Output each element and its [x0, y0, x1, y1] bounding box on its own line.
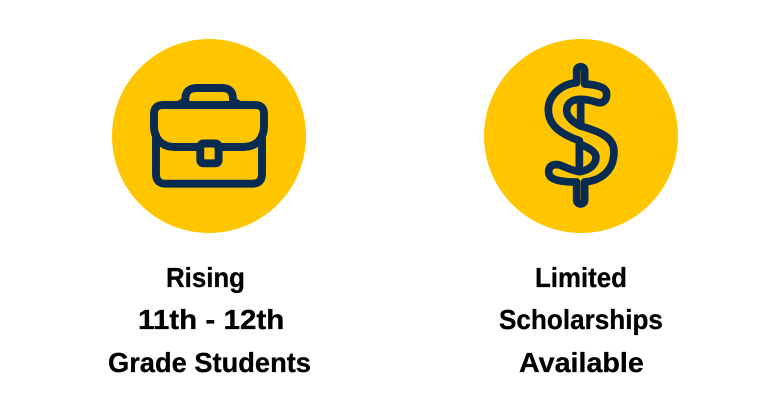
text: rising 11th - 12th grade students — [108, 262, 311, 378]
text: rising 11th - 12th grade students: 11th - 12th — [138, 305, 284, 336]
text: limited scholarships available: Limited — [535, 262, 627, 293]
panel: limited scholarships — [484, 39, 678, 379]
text: limited scholarships available: Available — [519, 347, 644, 379]
panel: rising students — [108, 39, 311, 378]
text: limited scholarships available: Scholarships — [499, 303, 663, 335]
text: rising 11th - 12th grade students: Grade Students — [108, 347, 311, 378]
icon: briefcase in yellow circle — [112, 39, 306, 233]
text: limited scholarships available — [499, 262, 663, 379]
icon: dollar sign in yellow circle — [484, 39, 678, 233]
text: rising 11th - 12th grade students: Rising — [166, 262, 245, 293]
